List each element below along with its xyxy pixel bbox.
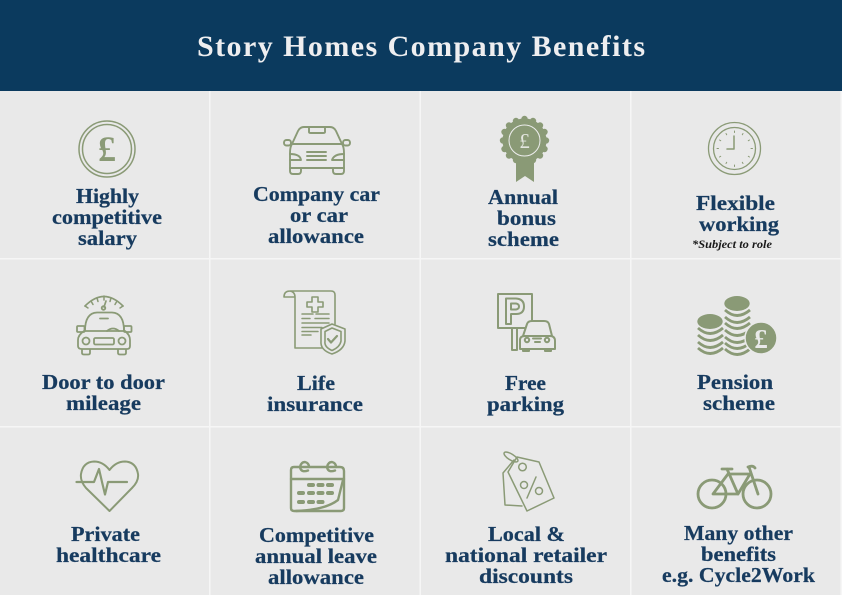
label: benefits: [701, 542, 776, 566]
label: [42, 370, 165, 415]
panel: retailer discounts: [421, 428, 630, 595]
icon: car with gauge: [77, 296, 132, 354]
icon: clock: [708, 122, 760, 174]
label: [56, 522, 161, 567]
icon: heart with pulse: [76, 462, 138, 511]
label: competitive: [52, 205, 162, 229]
label: Free: [505, 371, 546, 395]
label: [488, 185, 559, 251]
label: Life: [297, 371, 335, 395]
icon: calendar: [291, 462, 344, 511]
label: Competitive: [259, 523, 374, 547]
label: scheme: [703, 391, 775, 415]
panel: annual bonus: [421, 91, 630, 258]
label: [52, 184, 162, 250]
title: Story Homes Company Benefits: [197, 30, 645, 63]
panel: highly competitive salary: [0, 91, 209, 258]
label: scheme: [488, 227, 559, 251]
label: Annual: [488, 185, 558, 209]
label: Pension: [697, 370, 773, 394]
label: Many other: [684, 521, 793, 545]
icon: pound coin: £: [98, 129, 116, 169]
label: national retailer: [445, 543, 607, 567]
icon: rosette: [500, 116, 549, 182]
icon: coin stacks: [697, 296, 777, 354]
footnote: *Subject to role: [692, 239, 772, 251]
icon: price tags: [503, 450, 554, 511]
label: Company car: [253, 182, 380, 206]
label: [255, 523, 377, 589]
label: or car: [290, 203, 348, 227]
label: [267, 371, 363, 416]
label: Door to door: [42, 370, 165, 394]
label: Highly: [76, 184, 140, 208]
label: annual leave: [255, 544, 377, 568]
label: [487, 371, 565, 416]
icon: car front: [284, 127, 350, 174]
panel: flexible working: [632, 91, 840, 258]
label: Local &: [488, 522, 565, 546]
label: allowance: [268, 565, 364, 589]
label: working: [699, 212, 780, 236]
panel: door to door mileage: [0, 260, 209, 426]
icon: bicycle: [698, 466, 771, 508]
label: [696, 191, 780, 236]
label: e.g. Cycle2Work: [662, 563, 815, 587]
header band: [0, 0, 842, 91]
icon: parking sign and car: [498, 294, 555, 351]
panel: annual leave: [210, 428, 420, 595]
label: [662, 521, 815, 587]
panel: other benefits: [632, 428, 840, 595]
label: [445, 522, 607, 588]
label: healthcare: [56, 543, 161, 567]
label: discounts: [479, 564, 573, 588]
label: insurance: [267, 392, 363, 416]
label: parking: [487, 392, 565, 416]
panel: company car: [210, 91, 420, 258]
label: Private: [71, 522, 140, 546]
icon: rosette: £: [519, 129, 530, 153]
panel: private healthcare: [0, 428, 209, 595]
label: salary: [78, 226, 138, 250]
label: [697, 370, 775, 415]
label: mileage: [66, 391, 141, 415]
label: allowance: [268, 224, 364, 248]
icon: coin stacks: £: [754, 324, 768, 354]
icon: pound coin: [79, 121, 135, 177]
label: [253, 182, 380, 248]
label: bonus: [497, 206, 556, 230]
icon: policy and shield: [284, 291, 345, 354]
panel: pension scheme: [632, 260, 840, 426]
panel: free parking: [421, 260, 630, 426]
panel: life insurance: [210, 260, 420, 426]
label: Flexible: [696, 191, 775, 215]
